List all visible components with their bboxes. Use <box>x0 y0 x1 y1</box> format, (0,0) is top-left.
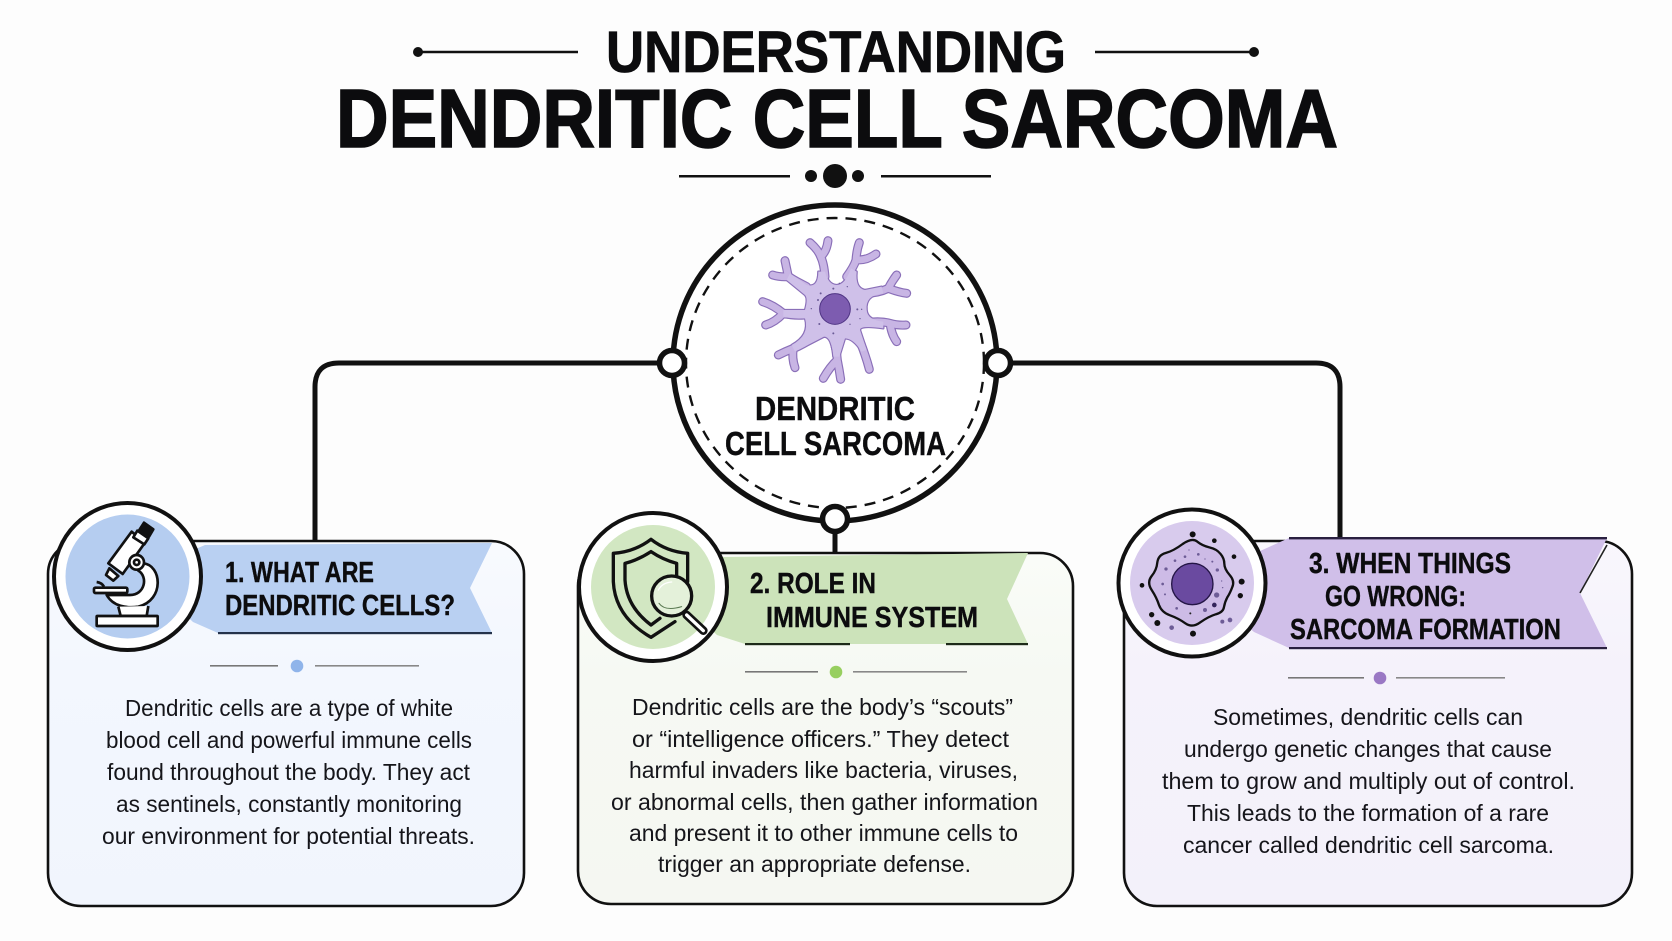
heading ribbon: IMMUNE SYSTEM <box>766 602 978 634</box>
central circle <box>660 205 1010 532</box>
body text: and present it to other immune cells to <box>629 820 1018 846</box>
body text: Dendritic cells are a type of white <box>125 695 453 721</box>
heading ribbon: 3. WHEN THINGS <box>1309 548 1511 580</box>
body text: or “intelligence officers.” They detect <box>632 726 1009 752</box>
outer ring <box>673 205 997 521</box>
heading ribbon <box>1240 537 1607 649</box>
heading ribbon: DENDRITIC CELLS? <box>225 590 455 622</box>
heading ribbon <box>170 543 492 634</box>
icon: dendritic cell <box>763 241 907 379</box>
body text: harmful invaders like bacteria, viruses, <box>629 757 1018 783</box>
heading ribbon <box>690 553 1028 645</box>
body text: our environment for potential threats. <box>102 823 475 849</box>
divider <box>1288 672 1505 684</box>
title block <box>336 20 1338 188</box>
card background <box>1124 541 1632 906</box>
body text: blood cell and powerful immune cells <box>106 727 472 753</box>
heading ribbon: 2. ROLE IN <box>750 568 876 600</box>
dashed inner ring <box>686 218 984 508</box>
icon: abnormal cell <box>1118 510 1266 656</box>
title ornament bottom <box>679 164 991 188</box>
body text: undergo genetic changes that cause <box>1184 736 1552 762</box>
body text: trigger an appropriate defense. <box>658 851 971 877</box>
connector nodes <box>660 350 1010 532</box>
body text: them to grow and multiply out of control. <box>1162 768 1575 794</box>
title line two: DENDRITIC CELL SARCOMA <box>336 72 1338 165</box>
divider <box>745 666 967 678</box>
body text: Sometimes, dendritic cells can <box>1213 704 1523 730</box>
title ornament left <box>413 47 578 57</box>
central label: DENDRITIC <box>755 390 915 427</box>
title line one: UNDERSTANDING <box>606 20 1066 85</box>
icon: shield with magnifier <box>579 513 727 661</box>
panel: when things go wrong <box>1118 510 1632 906</box>
divider <box>210 660 419 672</box>
title ornament right <box>1095 47 1259 57</box>
heading ribbon: GO WRONG: <box>1325 581 1466 613</box>
connector lines <box>315 363 1340 554</box>
body text <box>1162 704 1575 858</box>
panel: role in immune system <box>578 513 1073 904</box>
body text: Dendritic cells are the body’s “scouts” <box>632 694 1013 720</box>
body text: cancer called dendritic cell sarcoma. <box>1183 832 1554 858</box>
body text <box>102 695 475 849</box>
heading ribbon: 1. WHAT ARE <box>225 557 374 589</box>
body text <box>611 694 1038 877</box>
panel: what are dendritic cells <box>48 503 524 906</box>
body text: found throughout the body. They act <box>107 759 470 785</box>
body text: or abnormal cells, then gather information <box>611 789 1038 815</box>
central label <box>725 390 946 462</box>
icon: microscope <box>54 503 201 650</box>
body text: as sentinels, constantly monitoring <box>116 791 462 817</box>
central label: CELL SARCOMA <box>725 425 946 462</box>
heading ribbon: SARCOMA FORMATION <box>1290 614 1561 646</box>
body text: This leads to the formation of a rare <box>1187 800 1549 826</box>
card background <box>578 553 1073 904</box>
card background <box>48 541 524 906</box>
